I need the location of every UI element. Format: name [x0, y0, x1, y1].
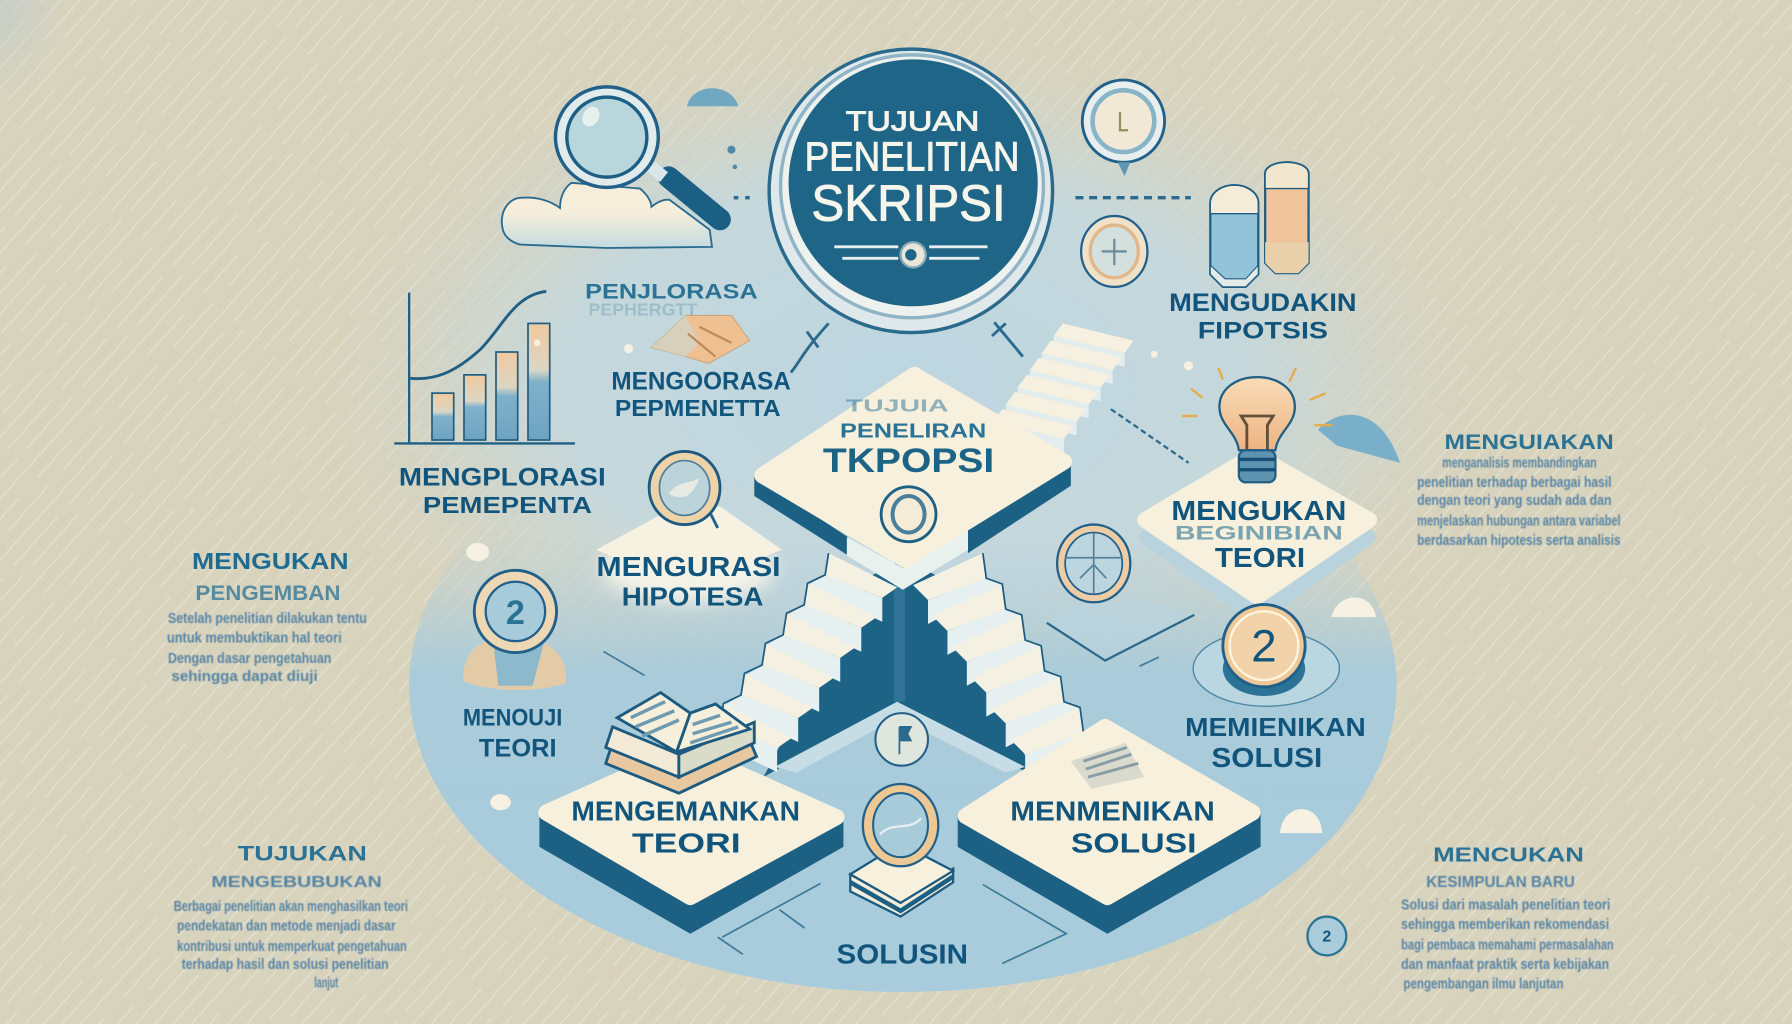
icon: small blue half circle	[687, 88, 738, 106]
text block: left lower: Berbagai penelitian akan menghasilkan teori	[174, 899, 408, 915]
navy wedge under stairs	[763, 562, 1035, 777]
platform label	[823, 395, 994, 480]
text block: left middle: untuk membuktikan hal teori	[167, 630, 342, 646]
icon: question badge with halo: 2	[1251, 621, 1277, 672]
soft blue glow	[331, 46, 1474, 731]
pedestal	[850, 843, 953, 917]
left staircase	[702, 553, 897, 772]
title text	[805, 105, 1019, 232]
icon: paper sheet	[1071, 743, 1144, 789]
label: menguji: MENOUJI	[463, 705, 562, 732]
connector: dashed diagonal	[1111, 409, 1189, 463]
text block: left lower	[174, 841, 408, 991]
icon: cloud	[502, 183, 712, 248]
label: penjlorasa	[585, 278, 758, 319]
title text: TUJUAN	[846, 105, 979, 136]
panel: lower left platform	[539, 750, 843, 934]
text block: left lower: kontribusi untuk memperkuat pengetahuan	[177, 939, 407, 955]
text block: left lower: pendekatan dan metode menjadi dasar	[177, 918, 396, 934]
platform icon	[881, 487, 936, 542]
cream hypothesis platform	[597, 506, 782, 602]
panel: lower right platform	[958, 727, 1261, 934]
label: menguji	[463, 705, 562, 763]
label: mengurasi: MENGURASI	[597, 551, 781, 582]
text block: right upper: dengan teori yang sudah ada dan	[1417, 493, 1611, 509]
text block: left lower: terhadap hasil dan solusi penelitian	[182, 957, 389, 973]
label: TEORI	[1215, 542, 1305, 573]
icon: magnifying glass	[555, 87, 720, 219]
label: BEGINIBIAN	[1175, 522, 1343, 544]
label: mengudakin	[1169, 289, 1357, 344]
chevron line	[1047, 615, 1194, 661]
icon: light bulb	[1182, 368, 1333, 482]
text block: right lower: sehingga memberikan rekomendasi	[1401, 917, 1609, 933]
text block: right upper	[1417, 429, 1621, 549]
label: MENGUKAN	[1171, 495, 1346, 526]
text block: left middle: PENGEMBAN	[195, 580, 341, 605]
title ornament	[834, 242, 987, 267]
label: memienikan: MEMIENIKAN	[1185, 712, 1366, 742]
decorative crack lines	[603, 651, 1159, 963]
text block: left lower: MENGEBUBUKAN	[211, 874, 382, 891]
icon: upper right badge	[1082, 80, 1165, 176]
label	[1171, 495, 1346, 573]
icon: cylinders	[1210, 162, 1309, 287]
title text: SKRIPSI	[811, 174, 1006, 232]
platform label: TUJUIA	[846, 395, 949, 415]
connector: right dashes	[1075, 196, 1191, 199]
central staircase structure	[702, 553, 1099, 778]
label: solusin: SOLUSIN	[837, 938, 968, 969]
text block: right upper: menganalisis membandingkan	[1442, 455, 1597, 471]
center platform	[754, 375, 1071, 590]
text block: left middle: Dengan dasar pengetahuan	[168, 651, 331, 667]
text block: right lower	[1401, 844, 1614, 993]
label	[1010, 796, 1215, 859]
label: mengoorasa: MENGOORASA	[611, 368, 791, 396]
bar chart	[394, 291, 575, 443]
right cylinder	[1265, 162, 1309, 273]
text block: right upper: berdasarkan hipotesis serta analisis	[1417, 533, 1621, 549]
label: mengplorasi: PEMEPENTA	[423, 492, 592, 518]
label: penjlorasa: PEPHERGTT	[589, 299, 698, 319]
panel: bulb platform	[1145, 368, 1369, 617]
icon: left badge with person: 2	[506, 594, 525, 632]
text block: left middle: MENGUKAN	[192, 548, 349, 574]
title text: PENELITIAN	[805, 133, 1019, 179]
label: mengplorasi	[399, 464, 606, 518]
icon: hypothesis badge	[649, 451, 720, 528]
icon: second right badge	[1081, 216, 1147, 287]
text block: right lower: pengembangan ilmu lanjutan	[1403, 977, 1563, 993]
panel: main title circle	[769, 49, 1053, 333]
connector: left dashes	[734, 196, 754, 199]
arrow: right to title circle	[992, 322, 1023, 357]
label: MENGEMANKAN	[571, 796, 800, 827]
top left corner tint	[0, 0, 69, 103]
text block: right lower: bagi pembaca memahami permasalahan	[1401, 938, 1614, 954]
icon: open book	[606, 693, 757, 793]
text block: left middle: Setelah penelitian dilakukan tentu	[168, 611, 367, 627]
text block: right lower: MENCUKAN	[1433, 844, 1584, 867]
decorative cream bumps	[466, 339, 1376, 833]
icon: small numbered circle: 2	[1322, 929, 1331, 946]
text block: left middle: sehingga dapat diuji	[171, 669, 318, 685]
text block: right upper: penelitian terhadap berbagai hasil	[1417, 475, 1611, 491]
arrow: left to title circle	[791, 323, 829, 373]
text block: left lower: TUJUKAN	[238, 841, 367, 866]
text block: left middle	[167, 548, 367, 685]
text block: left lower: lanjut	[314, 975, 338, 991]
chevron shape	[1047, 600, 1194, 661]
label: mengurasi	[597, 551, 781, 612]
badge	[863, 784, 938, 866]
label: mengudakin: FIPOTSIS	[1198, 317, 1328, 344]
icon: small numbered circle	[1307, 917, 1346, 955]
label: mengplorasi: MENGPLORASI	[399, 464, 606, 492]
label: menguji: TEORI	[479, 735, 557, 763]
label: mengurasi: HIPOTESA	[622, 582, 763, 612]
platform label: TKPOPSI	[823, 442, 994, 480]
text block: right lower: KESIMPULAN BARU	[1426, 874, 1575, 891]
platform label: PENELIRAN	[840, 420, 986, 443]
dots beside magnifier	[727, 146, 737, 169]
label: memienikan	[1185, 712, 1366, 773]
label: penjlorasa: PENJLORASA	[585, 278, 758, 303]
text block: right lower: dan manfaat praktik serta kebijakan	[1401, 957, 1609, 973]
label: mengudakin: MENGUDAKIN	[1169, 289, 1357, 317]
upper right staircase	[993, 323, 1134, 453]
label: memienikan: SOLUSI	[1211, 742, 1322, 773]
icon: orange map pieces	[651, 315, 750, 363]
text block: right upper: menjelaskan hubungan antara variabel	[1417, 514, 1621, 530]
text block: right lower: Solusi dari masalah penelitian teori	[1401, 898, 1610, 914]
icon: question badge with halo	[1193, 605, 1339, 706]
icon: flag badge	[875, 713, 928, 766]
label: MENMENIKAN	[1010, 796, 1215, 827]
icon: left badge with person	[463, 570, 566, 690]
wedge center stripe	[894, 568, 905, 702]
light floor band	[775, 702, 1025, 773]
icon: compass badge	[1057, 525, 1130, 602]
large blue base ellipse	[409, 379, 1397, 992]
label	[571, 796, 800, 859]
blue leaf decoration	[1318, 415, 1400, 463]
label: mengoorasa	[611, 368, 791, 421]
right staircase	[913, 553, 1099, 778]
icon: bottom badge on pedestal	[850, 784, 953, 917]
label: mengoorasa: PEPMENETTA	[615, 395, 781, 421]
label: SOLUSI	[1071, 828, 1197, 859]
text block: right upper: MENGUIAKAN	[1445, 429, 1614, 454]
left cylinder	[1210, 185, 1258, 287]
label: TEORI	[632, 828, 741, 859]
